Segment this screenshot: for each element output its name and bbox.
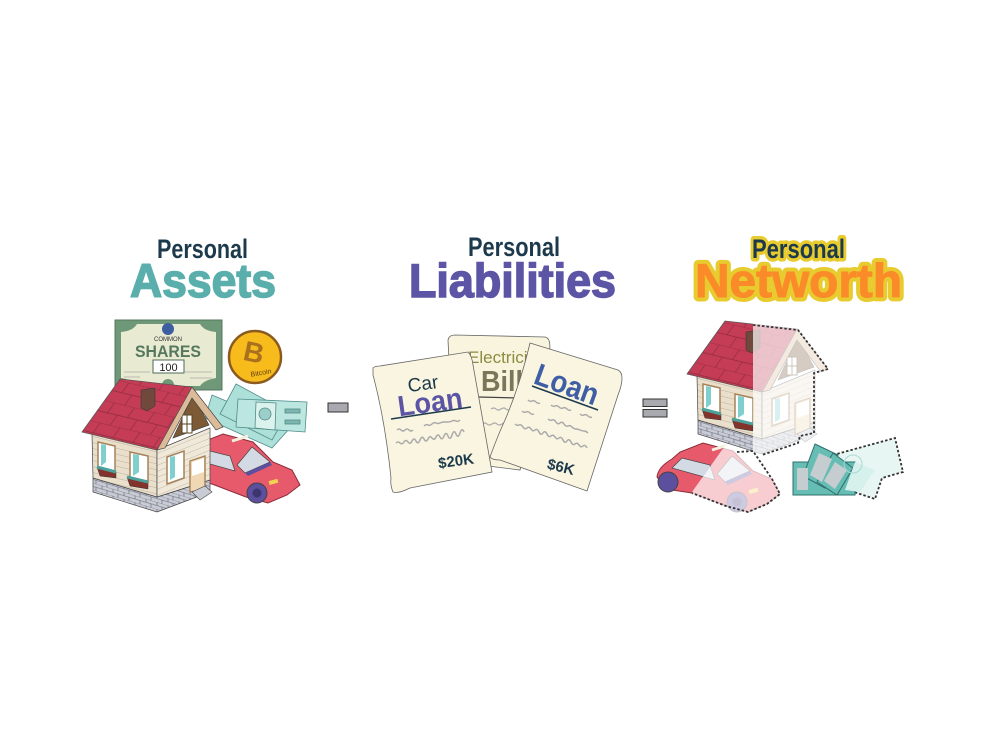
document: car loan: Car — [406, 372, 440, 397]
icon: partly owned banknotes — [793, 438, 903, 499]
operator: minus — [328, 403, 348, 412]
document: electricity bill — [448, 335, 550, 470]
icon: bitcoin coin: Bitcoin — [250, 368, 272, 379]
document: car loan — [373, 352, 492, 492]
icon: partly owned car — [657, 443, 780, 512]
document: car loan: $20K — [437, 451, 475, 472]
icon: share certificate: SHARES — [135, 342, 201, 361]
illustration: networth group — [657, 321, 903, 512]
document: car loan: Loan — [396, 383, 465, 423]
title: Personal Networth: Personal — [752, 234, 845, 264]
icon: bitcoin coin: B — [241, 335, 267, 370]
title: Personal Assets: Assets — [130, 254, 276, 307]
document: loan — [490, 343, 622, 491]
icon: share certificate: 100 — [159, 362, 178, 374]
title: Personal Assets — [130, 234, 276, 307]
document: loan: $6K — [545, 456, 576, 479]
icon: share certificate — [115, 320, 222, 391]
icon: partly owned house — [687, 321, 828, 455]
document: electricity bill: Bill — [481, 366, 523, 398]
title: Personal Liabilities — [409, 232, 616, 307]
title: Personal Liabilities: Personal — [468, 232, 560, 262]
icon: share certificate: COMMON — [154, 337, 182, 343]
title: Personal Assets: Personal — [157, 234, 248, 264]
icon: banknotes — [205, 384, 307, 448]
illustration: assets group — [82, 320, 307, 512]
icon: bitcoin coin — [229, 331, 281, 383]
title: Personal Liabilities: Liabilities — [409, 254, 616, 307]
illustration: liabilities documents — [373, 335, 622, 492]
title: Personal Networth: Networth — [695, 254, 902, 307]
document: electricity bill: Electricity — [468, 348, 541, 367]
operator: equals — [643, 399, 667, 417]
document: loan: Loan — [530, 357, 604, 412]
title: Personal Networth: Networth — [695, 254, 902, 307]
title: Personal Networth: Personal — [752, 234, 845, 264]
